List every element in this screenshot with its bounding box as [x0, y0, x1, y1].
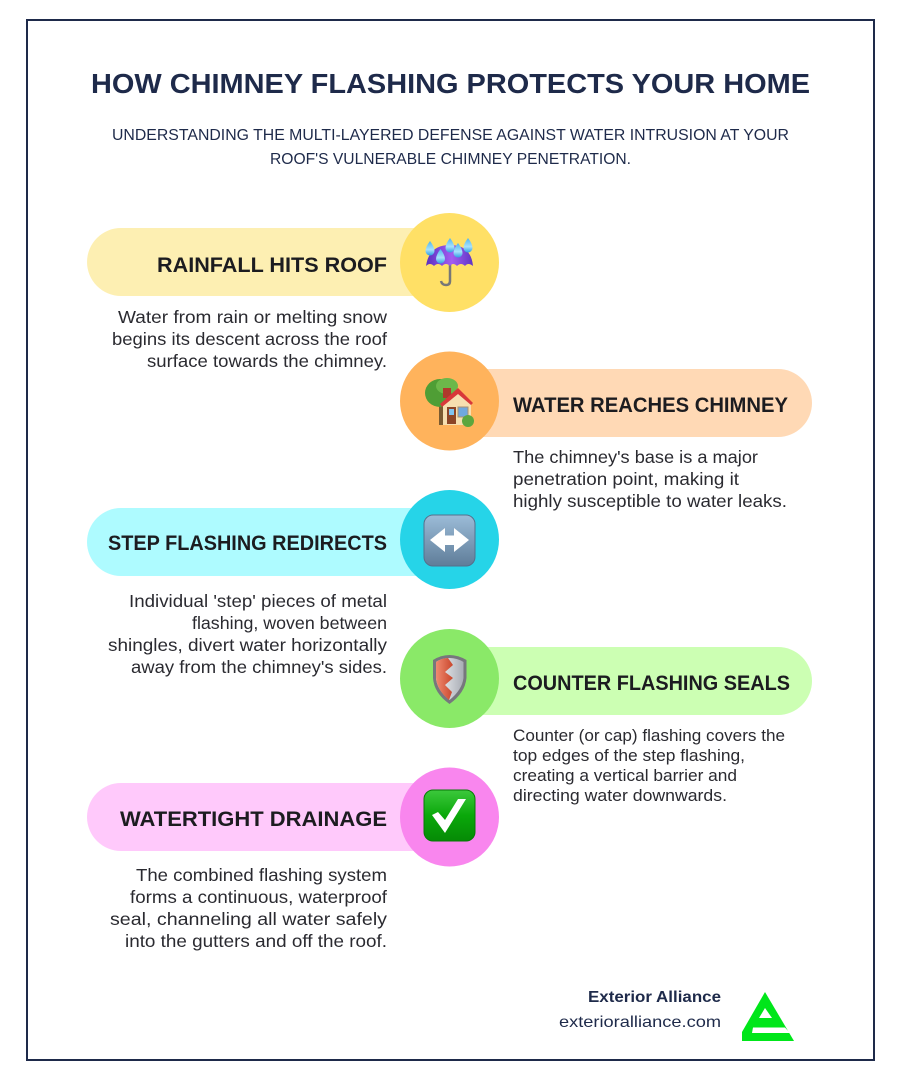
footer brand [559, 989, 794, 1041]
step 2 pill [450, 369, 812, 437]
step 5 icon: check mark [400, 768, 499, 866]
step 1: rainfall hits roof [87, 213, 499, 371]
step 1 pill [87, 228, 450, 296]
step 4 pill [450, 647, 812, 715]
step 5 description: forms a continuous, waterproof [130, 887, 387, 907]
step 4 description [513, 727, 785, 805]
logo [742, 992, 794, 1041]
step 5 description: into the gutters and off the roof. [125, 931, 387, 951]
step 5 heading: WATERTIGHT DRAINAGE [120, 807, 387, 831]
step 5: watertight drainage [87, 768, 499, 951]
step 3 pill [87, 508, 450, 576]
step 5 description [110, 865, 387, 951]
step 1 description: Water from rain or melting snow [118, 307, 387, 327]
brand name: Exterior Alliance [588, 989, 721, 1006]
step 4 description: creating a vertical barrier and [513, 767, 737, 785]
step 4 description: directing water downwards. [513, 787, 727, 805]
step 3 icon: left-right arrow [400, 490, 499, 589]
step 2: water reaches chimney [400, 352, 812, 511]
step 5 description: The combined flashing system [136, 865, 387, 885]
subtitle: UNDERSTANDING THE MULTI-LAYERED DEFENSE AGAINST WATER INTRUSION AT YOUR [112, 127, 789, 144]
step 1 description [112, 307, 387, 371]
step 1 description: begins its descent across the roof [112, 329, 387, 349]
step 1 icon: umbrella with rain [400, 213, 499, 312]
step 4: counter flashing seals [400, 629, 812, 805]
step 3 description: Individual 'step' pieces of metal [129, 591, 387, 611]
website: exterioralliance.com [559, 1014, 721, 1031]
step 4 description: top edges of the step flashing, [513, 747, 745, 765]
step 2 description [513, 447, 787, 511]
step 5 description: seal, channeling all water safely [110, 909, 387, 929]
step 4 description: Counter (or cap) flashing covers the [513, 727, 785, 745]
subtitle: ROOF'S VULNERABLE CHIMNEY PENETRATION. [270, 151, 631, 168]
step 2 description: The chimney's base is a major [513, 447, 758, 467]
step 2 icon: house with tree [400, 352, 499, 450]
step 1 description: surface towards the chimney. [147, 351, 387, 371]
step 2 description: penetration point, making it [513, 469, 739, 489]
step 3 heading: STEP FLASHING REDIRECTS [108, 531, 387, 555]
step 3 description: flashing, woven between [192, 613, 387, 633]
step 3: step flashing redirects [87, 490, 499, 677]
step 4 icon: shield [400, 629, 499, 728]
step 1 heading: RAINFALL HITS ROOF [157, 253, 387, 277]
step 3 description: away from the chimney's sides. [131, 657, 387, 677]
step 5 pill [87, 783, 450, 851]
step 2 description: highly susceptible to water leaks. [513, 491, 787, 511]
title: HOW CHIMNEY FLASHING PROTECTS YOUR HOME [91, 68, 810, 99]
step 3 description: shingles, divert water horizontally [108, 635, 387, 655]
step 2 heading: WATER REACHES CHIMNEY [513, 393, 788, 417]
step 4 heading: COUNTER FLASHING SEALS [513, 671, 790, 695]
step 3 description [108, 591, 387, 677]
subtitle [112, 127, 789, 168]
